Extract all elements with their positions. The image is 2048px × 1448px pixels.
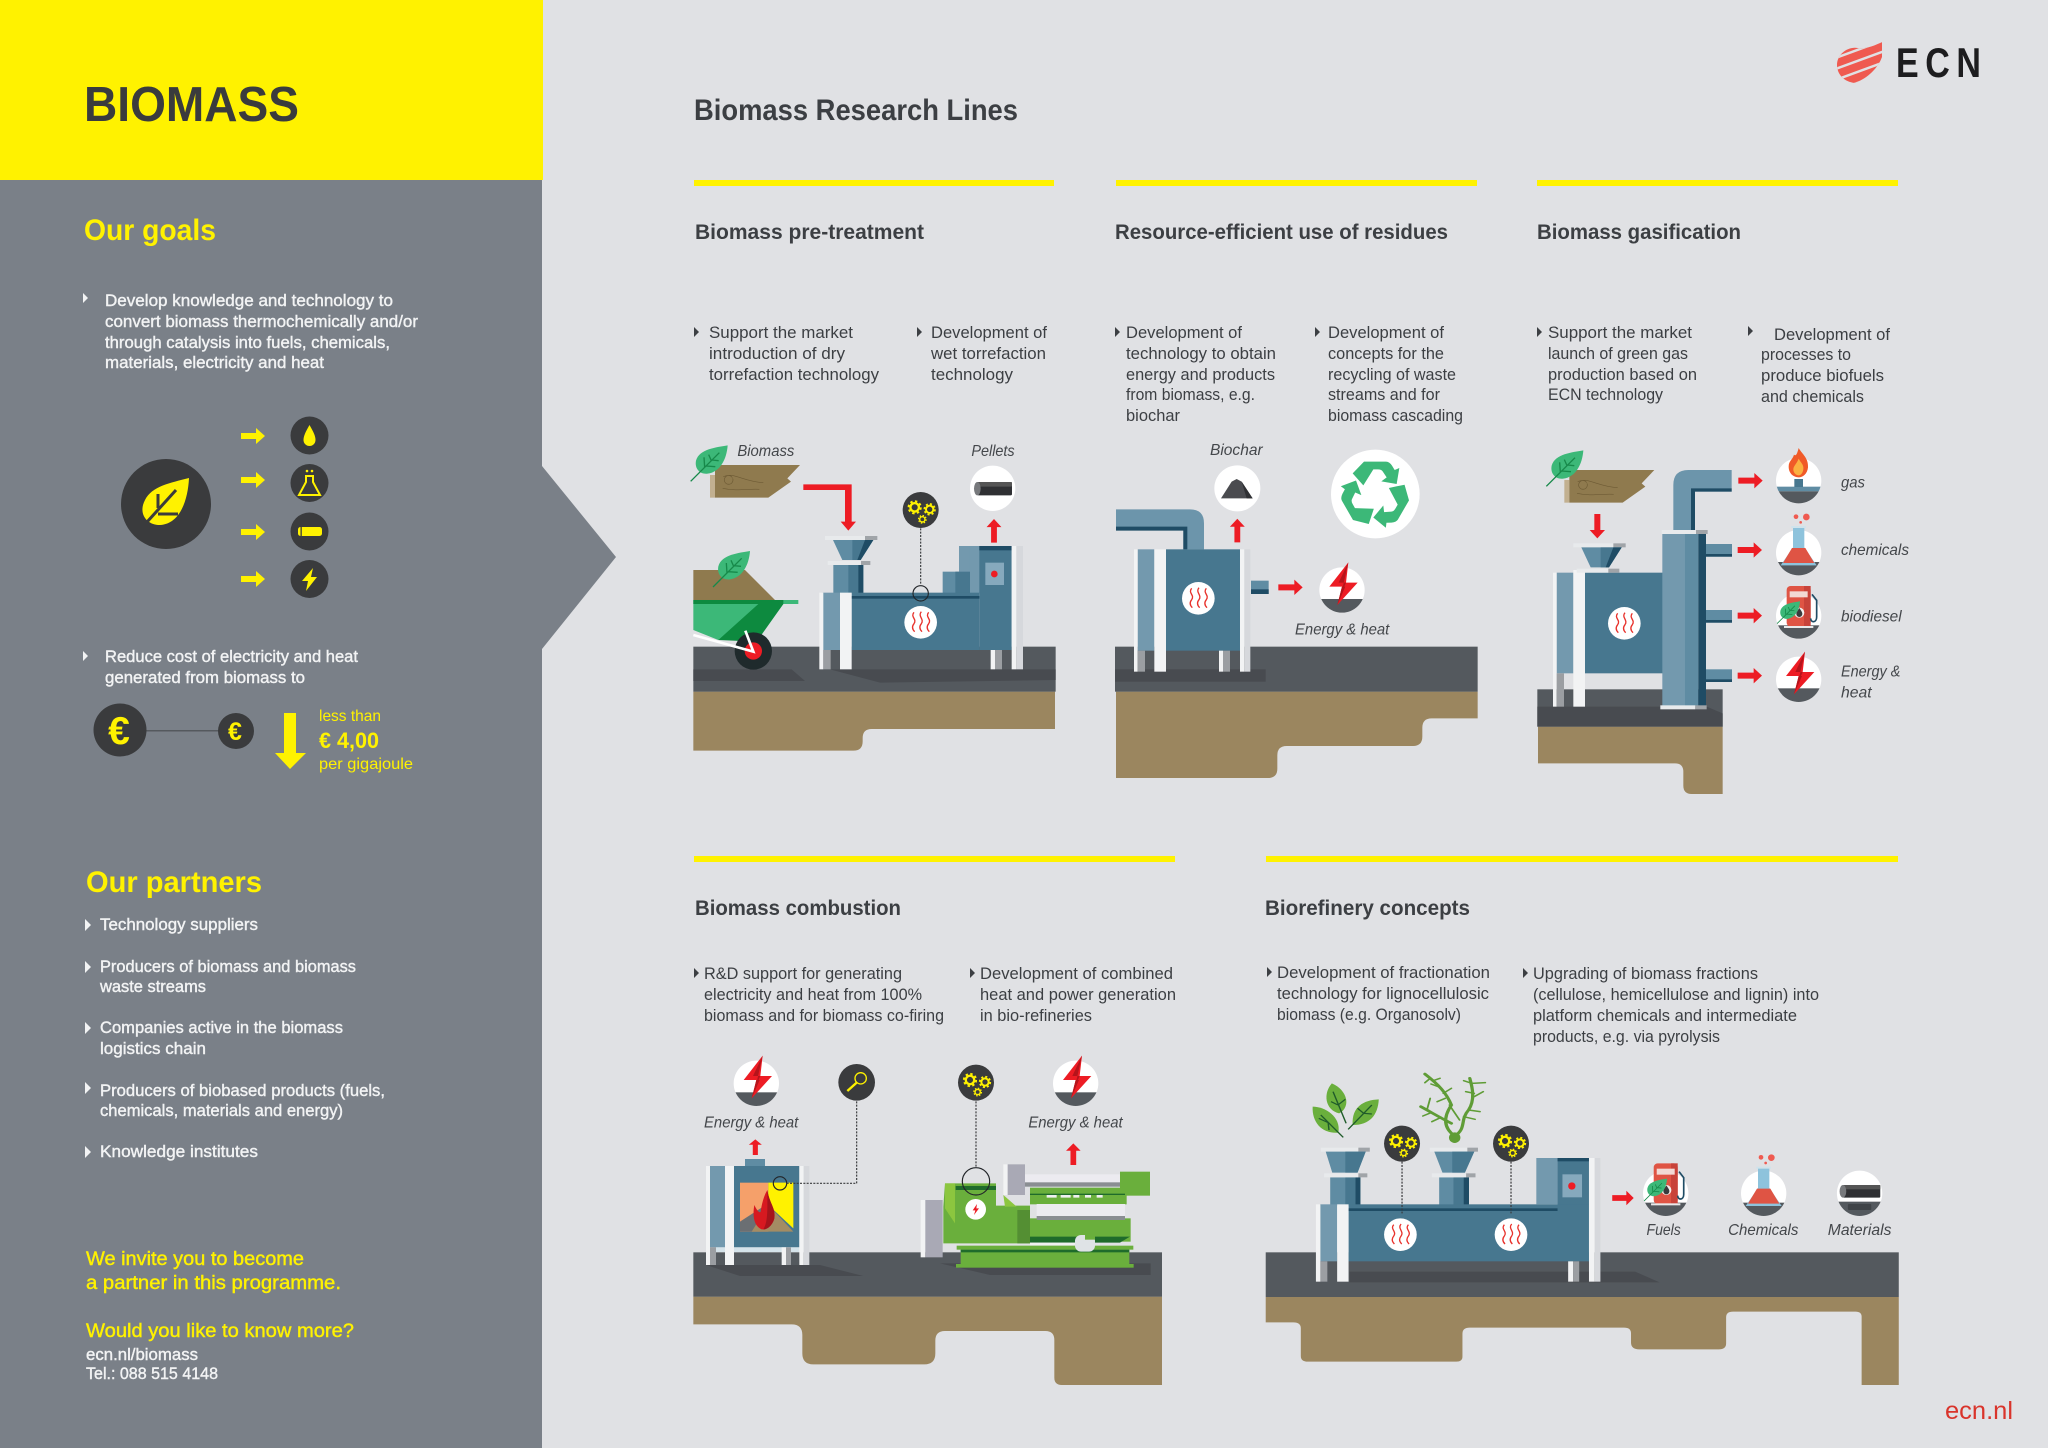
bullet text: biochar: biochar bbox=[1126, 407, 1180, 425]
sidebar panel bbox=[0, 0, 616, 1448]
partners list: logistics chain bbox=[100, 1040, 206, 1058]
bullet text: fractionation: biomass (e.g. Organosolv) bbox=[1277, 1006, 1461, 1024]
ground bbox=[1115, 647, 1478, 778]
illustration: combustion bbox=[693, 1056, 1162, 1385]
label: biomass: Biomass bbox=[737, 443, 794, 460]
invitation text: a partner in this programme. bbox=[86, 1272, 341, 1294]
bullet text: dry torrefaction bbox=[694, 324, 880, 384]
bullet text: biofuels: processes to bbox=[1761, 346, 1851, 364]
panel: biomass combustion bbox=[693, 856, 1176, 1385]
callout: engine gears bbox=[958, 1065, 994, 1195]
bullet text: co-firing: R&D support for generating bbox=[704, 965, 902, 983]
bullet text: combined heat and power bbox=[970, 965, 1176, 1025]
bullet text: biochar: from biomass, e.g. bbox=[1126, 386, 1255, 404]
cost label: less than bbox=[319, 708, 381, 725]
goal 1 text bbox=[83, 292, 419, 372]
label: energy and heat left: Energy & heat bbox=[704, 1115, 799, 1132]
bullet text: fractionation bbox=[1267, 964, 1490, 1024]
cost label bbox=[319, 708, 413, 773]
bullet text: biofuels: Development of bbox=[1774, 326, 1890, 344]
goal 1 text: convert biomass thermochemically and/or bbox=[105, 313, 419, 331]
bullet text: biofuels: produce biofuels bbox=[1761, 367, 1884, 385]
bullet text: dry torrefaction: torrefaction technology bbox=[709, 366, 880, 384]
bullet text: upgrading: products, e.g. via pyrolysis bbox=[1533, 1028, 1720, 1046]
cost label: per gigajoule bbox=[319, 756, 413, 773]
illustration: gasifier bbox=[1537, 448, 1909, 794]
goal 2 text: generated from biomass to bbox=[105, 669, 305, 687]
goal 1 text: Develop knowledge and technology to bbox=[105, 292, 393, 310]
partners list: waste streams bbox=[99, 978, 206, 996]
icon: large euro: € bbox=[108, 710, 130, 753]
panel: biomass pre-treatment bbox=[691, 180, 1056, 751]
bullet text: biochar: energy and products bbox=[1126, 366, 1275, 384]
arrow: input bbox=[803, 484, 856, 531]
website link: ecn.nl bbox=[1945, 1397, 2013, 1425]
bullet text: wet torrefaction: wet torrefaction bbox=[930, 345, 1046, 363]
callout: process gears bbox=[903, 492, 939, 601]
arrow: down bbox=[275, 713, 306, 769]
bullet text: green gas: ECN technology bbox=[1548, 386, 1664, 404]
bullet text: combined heat and power: in bio-refineries bbox=[980, 1007, 1092, 1025]
illustration: torrefaction plant bbox=[691, 443, 1056, 751]
icon: recycling bbox=[1331, 450, 1420, 538]
bullet text: cascading: Development of bbox=[1328, 324, 1444, 342]
icons: heat bbox=[1384, 1218, 1527, 1251]
heading: Biomass pre-treatment bbox=[695, 220, 924, 244]
icon: leaf bbox=[121, 459, 211, 549]
logo: ECN: ECN bbox=[1896, 41, 1988, 87]
bullet text: co-firing bbox=[694, 965, 944, 1025]
invitation text: Would you like to know more? bbox=[86, 1320, 354, 1342]
arrow: stove output bbox=[749, 1139, 762, 1155]
illustration: residue plant bbox=[1115, 442, 1478, 778]
wheelbarrow bbox=[693, 551, 798, 670]
icon: small euro: € bbox=[228, 718, 242, 746]
icon: pellet bbox=[290, 512, 328, 550]
label: biochar: Biochar bbox=[1210, 442, 1263, 459]
bullet text: cascading bbox=[1315, 324, 1463, 425]
icon: leaves bbox=[1313, 1083, 1379, 1137]
machine bbox=[819, 536, 1023, 669]
panel: biorefinery concepts bbox=[1265, 856, 1899, 1385]
heading: our partners: Our partners bbox=[86, 866, 262, 899]
label: energy and heat right: Energy & heat bbox=[1028, 1115, 1123, 1132]
panel: biomass gasification bbox=[1537, 180, 1909, 794]
label: chemicals: Chemicals bbox=[1728, 1221, 1798, 1239]
arrow: energy bbox=[1278, 580, 1303, 595]
icon: small euro bbox=[218, 713, 254, 749]
bullet text: cascading: biomass cascading bbox=[1328, 407, 1463, 425]
icon: chemicals bbox=[1776, 514, 1821, 576]
label: energy and heat: heat bbox=[1841, 684, 1872, 701]
bullet text: fractionation: Development of fractionation bbox=[1277, 964, 1490, 982]
heading: Biomass gasification bbox=[1537, 220, 1741, 244]
icon: pellets bbox=[970, 466, 1015, 511]
contact details: ecn.nl/biomass bbox=[86, 1346, 198, 1364]
icon: biomass input bbox=[1546, 450, 1654, 503]
partners list: Producers of biomass and biomass bbox=[100, 958, 356, 976]
gasifier bbox=[1553, 470, 1732, 709]
label: energy and heat: Energy & bbox=[1841, 664, 1900, 681]
callout: inspection bbox=[773, 1064, 875, 1190]
label: materials: Materials bbox=[1828, 1221, 1891, 1239]
ground bbox=[693, 1252, 1162, 1385]
bullet text: upgrading: platform chemicals and intermediate bbox=[1533, 1007, 1797, 1025]
heading: Biorefinery concepts bbox=[1265, 896, 1470, 920]
icon: heat bbox=[1182, 582, 1215, 615]
arrows to outputs bbox=[1738, 473, 1763, 683]
title: BIOMASS bbox=[84, 78, 299, 132]
section rule bbox=[1537, 180, 1898, 186]
cost label: € 4,00 bbox=[319, 728, 379, 753]
stove bbox=[706, 1159, 809, 1265]
machine bbox=[1316, 1148, 1600, 1282]
bullet text: dry torrefaction: Support the market bbox=[709, 324, 853, 342]
bullet text: green gas bbox=[1537, 324, 1697, 404]
heading: our goals: Our goals bbox=[84, 214, 216, 247]
bullet text: biochar: Development of bbox=[1126, 324, 1242, 342]
arrow: output up bbox=[1230, 519, 1245, 542]
engine bbox=[921, 1164, 1150, 1268]
bullet text: wet torrefaction: Development of bbox=[931, 324, 1047, 342]
icon: biomass input bbox=[691, 445, 800, 498]
main heading: Biomass Research Lines bbox=[694, 94, 1018, 127]
icon: heat bbox=[904, 606, 937, 639]
bullet text: biofuels: and chemicals bbox=[1761, 388, 1864, 406]
section rule bbox=[1116, 180, 1477, 186]
panel: resource-efficient use of residues bbox=[1115, 180, 1478, 778]
ground bbox=[1266, 1252, 1899, 1385]
bullet text: green gas: production based on bbox=[1548, 366, 1697, 384]
illustration: biorefinery bbox=[1266, 1074, 1899, 1385]
sidebar grey background with arrow bbox=[0, 180, 616, 1448]
label: energy and heat bbox=[1841, 664, 1900, 701]
bullet text: co-firing: biomass and for biomass co-firing bbox=[704, 1007, 944, 1025]
title block yellow bbox=[0, 0, 543, 180]
icon: chemicals flask bbox=[290, 464, 328, 502]
icon: heat bbox=[1608, 607, 1641, 640]
partners list: Producers of biobased products (fuels, bbox=[100, 1082, 385, 1100]
heading: Biomass combustion bbox=[695, 896, 901, 920]
label: chemicals: chemicals bbox=[1841, 542, 1909, 559]
partners list: Technology suppliers bbox=[100, 916, 258, 934]
bullet text: upgrading bbox=[1523, 965, 1819, 1046]
ground bbox=[1537, 689, 1723, 794]
contact details bbox=[86, 1346, 218, 1383]
bullet text: combined heat and power: Development of combined bbox=[980, 965, 1173, 983]
arrow: engine output bbox=[1066, 1143, 1081, 1165]
arrow: output bbox=[987, 519, 1001, 543]
partners list bbox=[85, 916, 385, 1161]
icon: energy left bbox=[734, 1056, 779, 1107]
contact details: Tel.: 088 515 4148 bbox=[86, 1365, 218, 1383]
partners list: Knowledge institutes bbox=[100, 1143, 258, 1161]
section rule bbox=[694, 856, 1175, 862]
bullet text: upgrading: Upgrading of biomass fractions bbox=[1533, 965, 1758, 983]
bullet text: upgrading: (cellulose, hemicellulose and lignin) into bbox=[1533, 986, 1819, 1004]
icon: chemicals bbox=[1741, 1154, 1786, 1217]
bullet text: green gas: launch of green gas bbox=[1548, 345, 1688, 363]
bullet text: biofuels bbox=[1748, 326, 1890, 406]
bullet text: co-firing: electricity and heat from 100% bbox=[704, 986, 922, 1004]
label: gas: gas bbox=[1841, 474, 1865, 491]
icon: algae bbox=[1421, 1074, 1485, 1143]
cost reduction graphic bbox=[94, 704, 413, 773]
icon: energy bbox=[1319, 562, 1365, 614]
logo: ECN bbox=[1837, 42, 1979, 83]
icon: fuel drop bbox=[290, 416, 328, 454]
arrow: feed bbox=[1590, 514, 1605, 538]
biomass conversion icons bbox=[121, 416, 328, 598]
bullet text: green gas: Support the market bbox=[1548, 324, 1692, 342]
icon: materials bbox=[1837, 1171, 1882, 1217]
heading: Resource-efficient use of residues bbox=[1115, 220, 1448, 244]
goal 2 text: Reduce cost of electricity and heat bbox=[105, 648, 358, 666]
goal 2 text bbox=[83, 648, 358, 687]
icon: biochar bbox=[1214, 465, 1260, 511]
bullet text: cascading: streams and for bbox=[1328, 386, 1440, 404]
icon: large euro bbox=[94, 704, 146, 756]
invitation text: We invite you to become bbox=[86, 1248, 304, 1270]
goal 1 text: through catalysis into fuels, chemicals, bbox=[105, 334, 390, 352]
section rule bbox=[1266, 856, 1898, 862]
bullet text: combined heat and power: heat and power generation bbox=[980, 986, 1176, 1004]
label: energy and heat: Energy & heat bbox=[1295, 621, 1390, 638]
label: biodiesel: biodiesel bbox=[1841, 609, 1902, 626]
label: fuels: Fuels bbox=[1647, 1221, 1681, 1239]
icon: energy right bbox=[1053, 1056, 1098, 1107]
icon: electricity bbox=[290, 560, 328, 598]
callouts: gears bbox=[1384, 1126, 1529, 1213]
bullet text: fractionation: technology for lignocellulosic bbox=[1277, 985, 1489, 1003]
icon: gas bbox=[1776, 448, 1821, 504]
bullet text: cascading: concepts for the bbox=[1328, 345, 1444, 363]
machine with pipe bbox=[1116, 509, 1269, 672]
section rule bbox=[694, 180, 1054, 186]
bullet text: cascading: recycling of waste bbox=[1328, 366, 1456, 384]
arrows to outputs bbox=[241, 428, 265, 587]
icon: fuels bbox=[1643, 1163, 1688, 1217]
bullet text: biochar bbox=[1115, 324, 1276, 425]
label: pellets: Pellets bbox=[971, 443, 1015, 460]
invitation text bbox=[86, 1248, 354, 1342]
bullet text: wet torrefaction: technology bbox=[931, 366, 1014, 384]
goal 1 text: materials, electricity and heat bbox=[105, 354, 324, 372]
arrow: to outputs bbox=[1612, 1191, 1634, 1205]
icon: biodiesel bbox=[1776, 586, 1821, 639]
partners list: Companies active in the biomass bbox=[100, 1019, 343, 1037]
icon: energy bbox=[1776, 652, 1821, 703]
bullet text: wet torrefaction bbox=[917, 324, 1047, 384]
bullet text: dry torrefaction: introduction of dry bbox=[709, 345, 846, 363]
bullet text: biochar: technology to obtain bbox=[1126, 345, 1276, 363]
ground bbox=[693, 647, 1056, 751]
partners list: chemicals, materials and energy) bbox=[100, 1102, 343, 1120]
